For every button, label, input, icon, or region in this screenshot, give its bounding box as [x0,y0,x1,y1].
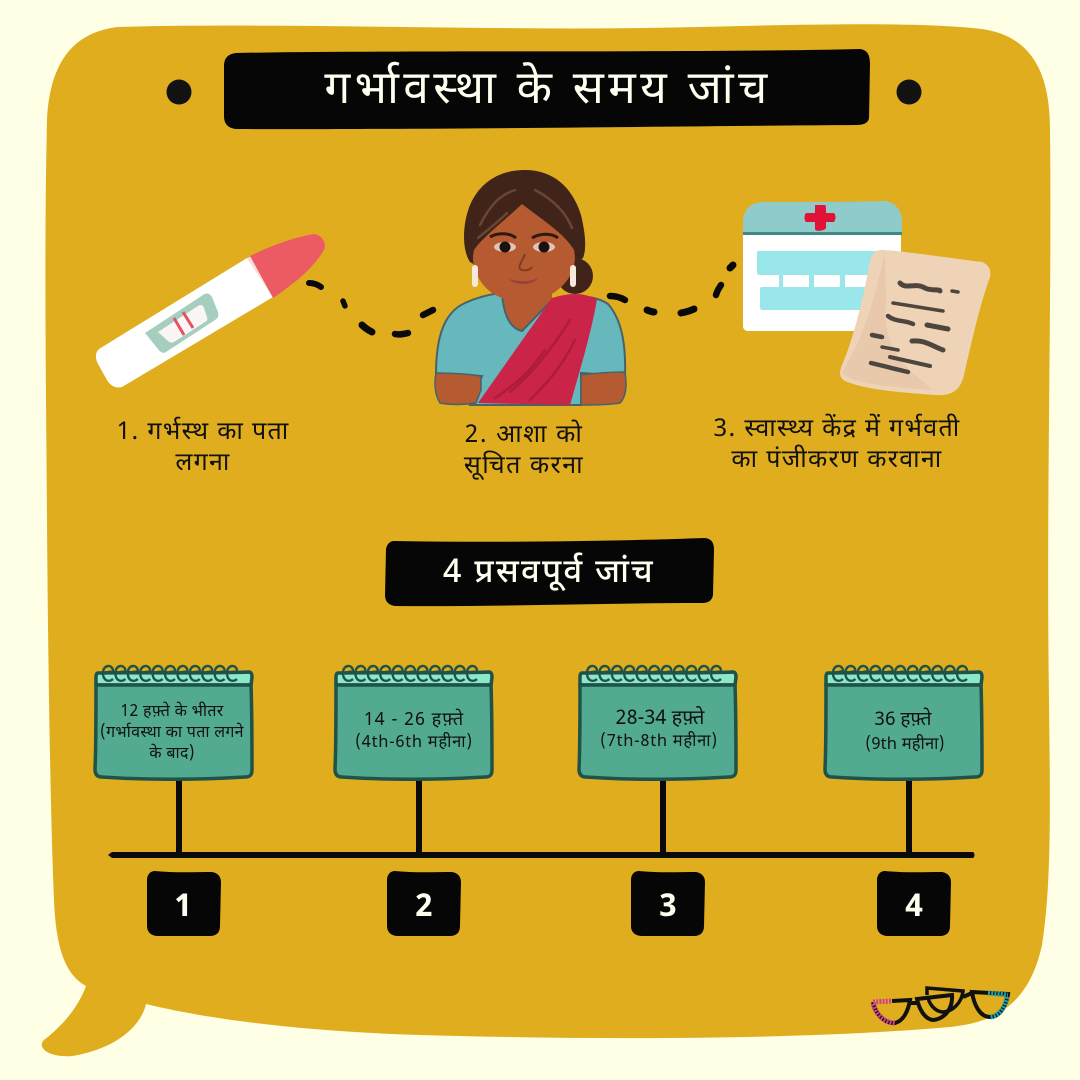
calendar card 3 [579,666,736,779]
calendar 1 text: 12 हफ़्ते के भीतर [120,701,224,723]
number badge 1: 1 [174,888,192,929]
red sari [478,294,597,405]
number badge 4 [877,871,951,936]
step 2 label: सूचित करना [464,450,584,484]
timeline stems and axis [108,778,974,858]
step 2 label: 2. आशा को [465,419,583,453]
number badge 3: 3 [659,888,677,929]
icon: pregnancy test kit [96,234,325,388]
calendar 1 text: के बाद) [149,743,195,765]
calendar 4 text [865,707,945,756]
hair highlights [478,190,572,238]
calendar card 1 [95,666,252,779]
hair bun [557,258,593,294]
step 2 label [464,419,584,484]
red cross [804,205,836,231]
blouse [436,293,625,405]
step 1 label: 1. गर्भस्थ का पता [116,416,290,450]
calendar card 4 [825,666,982,779]
calendar 2 text: 14 - 26 हफ़्ते [364,708,464,733]
step 1 label [116,416,290,481]
calendar 2 text [355,708,473,754]
number badge 1 [147,871,221,936]
eyebrows [490,234,558,238]
number badge 3 [631,871,705,936]
calendar card 2 [335,666,492,779]
sari folds [495,320,575,400]
illustration: ASHA worker [435,170,626,405]
dashed path left: test kit to ASHA [309,283,433,334]
neck [497,285,552,340]
subtitle text: 4 प्रसवपूर्व जांच [443,552,655,596]
right earring [570,268,576,284]
icon: health centre building [743,201,902,331]
arms [435,373,481,404]
title banner [224,49,870,129]
step 3 label [713,413,961,478]
icon: paper document [840,250,990,395]
title text: गर्भावस्था के समय जांच [324,60,772,122]
hair [464,170,585,268]
decorative title dot right [896,80,922,104]
decorative title dot left [166,80,192,104]
calendar 3 text [600,705,718,753]
calendar 1 text [100,701,245,765]
step 3 label: का पंजीकरण करवाना [731,444,943,478]
step 1 label: लगना [175,449,231,481]
calendar 3 text: 28-34 हफ़्ते [616,705,705,733]
eyes [494,242,516,252]
calendar 3 text: (7th-8th महीना) [600,731,718,753]
dashed path right: ASHA to health centre [610,265,733,313]
nose [519,254,532,270]
left earring [472,268,478,284]
subtitle banner [385,538,714,606]
logo: three pairs of glasses [873,988,1008,1023]
number badge 4: 4 [905,888,923,929]
number badge 2 [387,871,461,936]
calendar 2 text: (4th-6th महीना) [355,732,473,754]
calendar 4 text: 36 हफ़्ते [874,707,933,733]
calendar 1 text: (गर्भावस्था का पता लगने [100,722,245,744]
calendar 4 text: (9th महीना) [865,734,945,756]
number badge 2: 2 [415,888,433,929]
face [473,204,575,302]
step 3 label: 3. स्वास्थ्य केंद्र में गर्भवती [713,413,961,447]
mouth [509,278,538,284]
